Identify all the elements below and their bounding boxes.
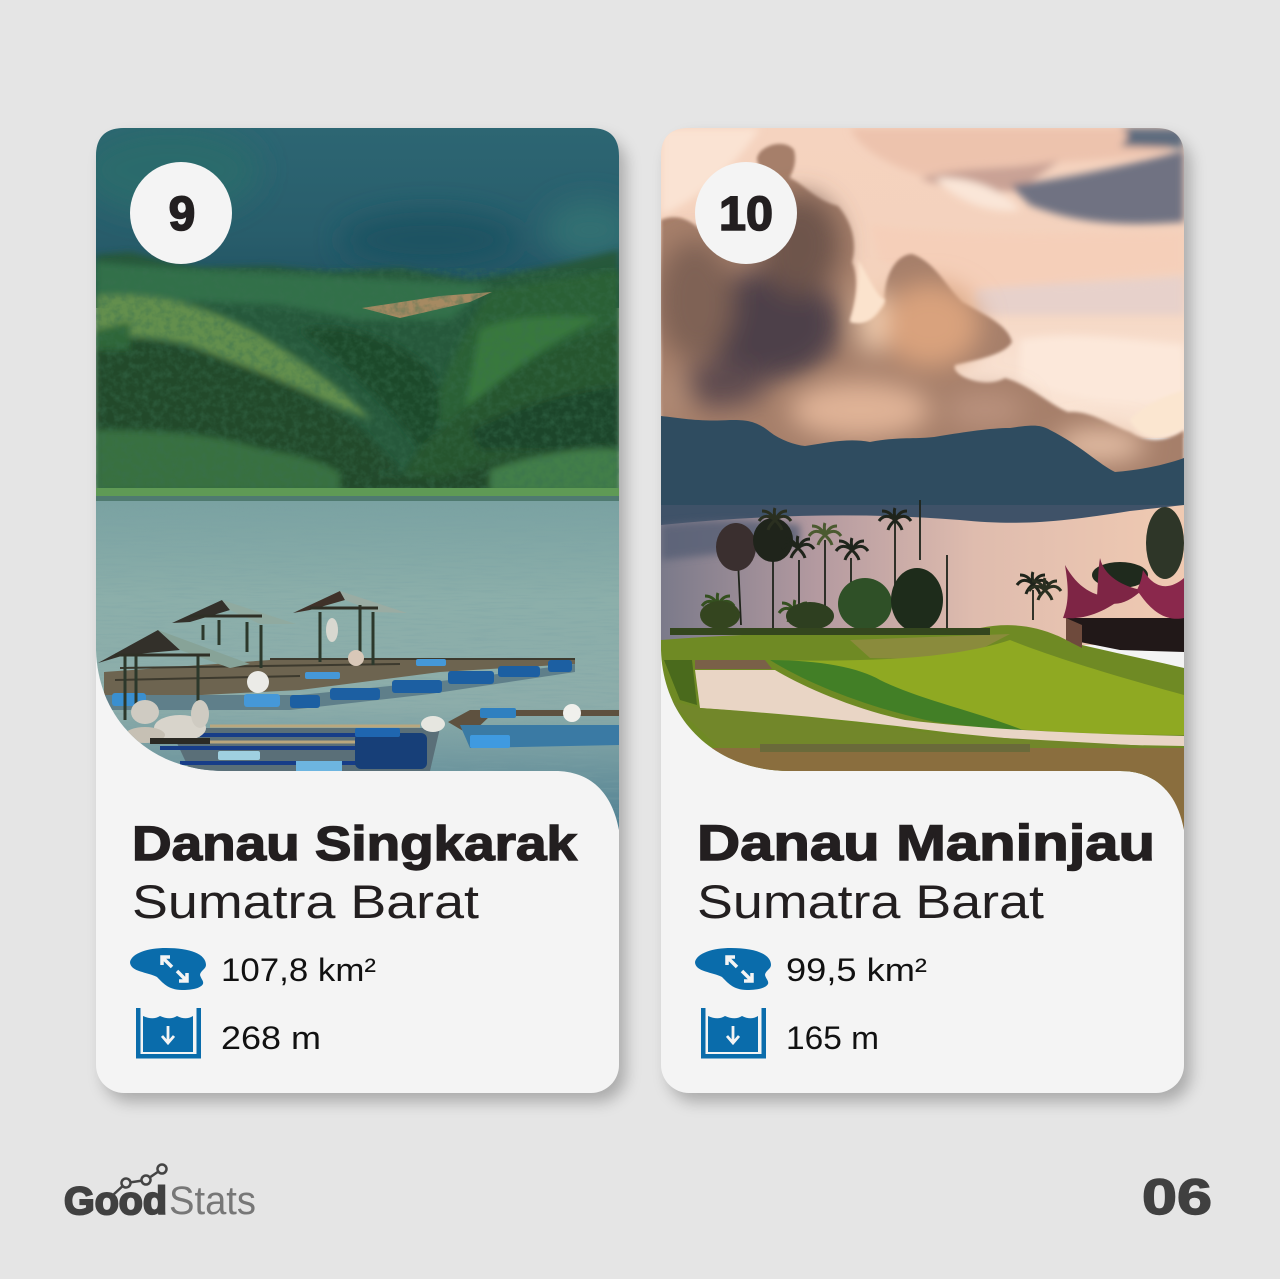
flooded paddy	[695, 670, 1184, 746]
lake	[661, 505, 1184, 645]
icon: lake area	[695, 948, 771, 990]
right raft	[448, 710, 619, 730]
rice fields	[661, 625, 1184, 790]
blue barrels	[112, 659, 572, 708]
panel: Danau Maninjau card	[661, 128, 1184, 1093]
icon: lake depth	[701, 1008, 766, 1058]
subheading: Sumatra Barat: Sumatra Barat	[132, 875, 479, 928]
depth value: 268 m	[221, 1020, 321, 1056]
panel: Danau Singkarak card	[96, 128, 619, 1093]
logo: GoodStats: Good	[64, 1180, 167, 1223]
near raft	[170, 728, 440, 771]
mountain ridge	[661, 416, 1184, 510]
photo: Danau Maninjau at sunset with rice fields	[650, 128, 1184, 830]
far raft	[104, 660, 575, 700]
logo: GoodStats: Stats	[169, 1179, 256, 1223]
heading: Danau Singkarak: Danau Singkarak	[132, 818, 577, 871]
traditional rumah gadang house	[1063, 558, 1184, 652]
number badge 9: 9	[169, 188, 195, 241]
subheading: Sumatra Barat: Sumatra Barat	[697, 875, 1044, 928]
soil patch on hillside	[362, 292, 492, 318]
forested hills	[96, 250, 619, 500]
palm trees and bushes	[670, 500, 1184, 635]
sky streaks and dark upper-right cloud	[661, 128, 1184, 404]
icon: lake depth	[136, 1008, 201, 1058]
logo: GoodStats	[64, 1163, 256, 1223]
distant mountain	[96, 128, 619, 258]
number badge 10: 10	[719, 188, 773, 241]
number badge 10	[695, 162, 797, 264]
forest texture	[96, 268, 619, 494]
sheds	[98, 591, 406, 720]
page number: 06	[1142, 1169, 1212, 1225]
depth value: 165 m	[786, 1020, 879, 1056]
area value: 107,8 km²	[221, 952, 376, 988]
foreground grass and brown strip	[672, 701, 1138, 746]
water	[96, 501, 619, 831]
photo: Danau Singkarak lake with floating fish cages	[80, 125, 635, 831]
number badge 9	[130, 162, 232, 264]
heading: Danau Maninjau: Danau Maninjau	[697, 815, 1155, 871]
icon: lake area	[130, 948, 206, 990]
area value: 99,5 km²	[786, 952, 927, 988]
shoreline	[96, 488, 619, 496]
cumulus cloud	[650, 144, 1184, 500]
white sacks	[125, 700, 210, 744]
